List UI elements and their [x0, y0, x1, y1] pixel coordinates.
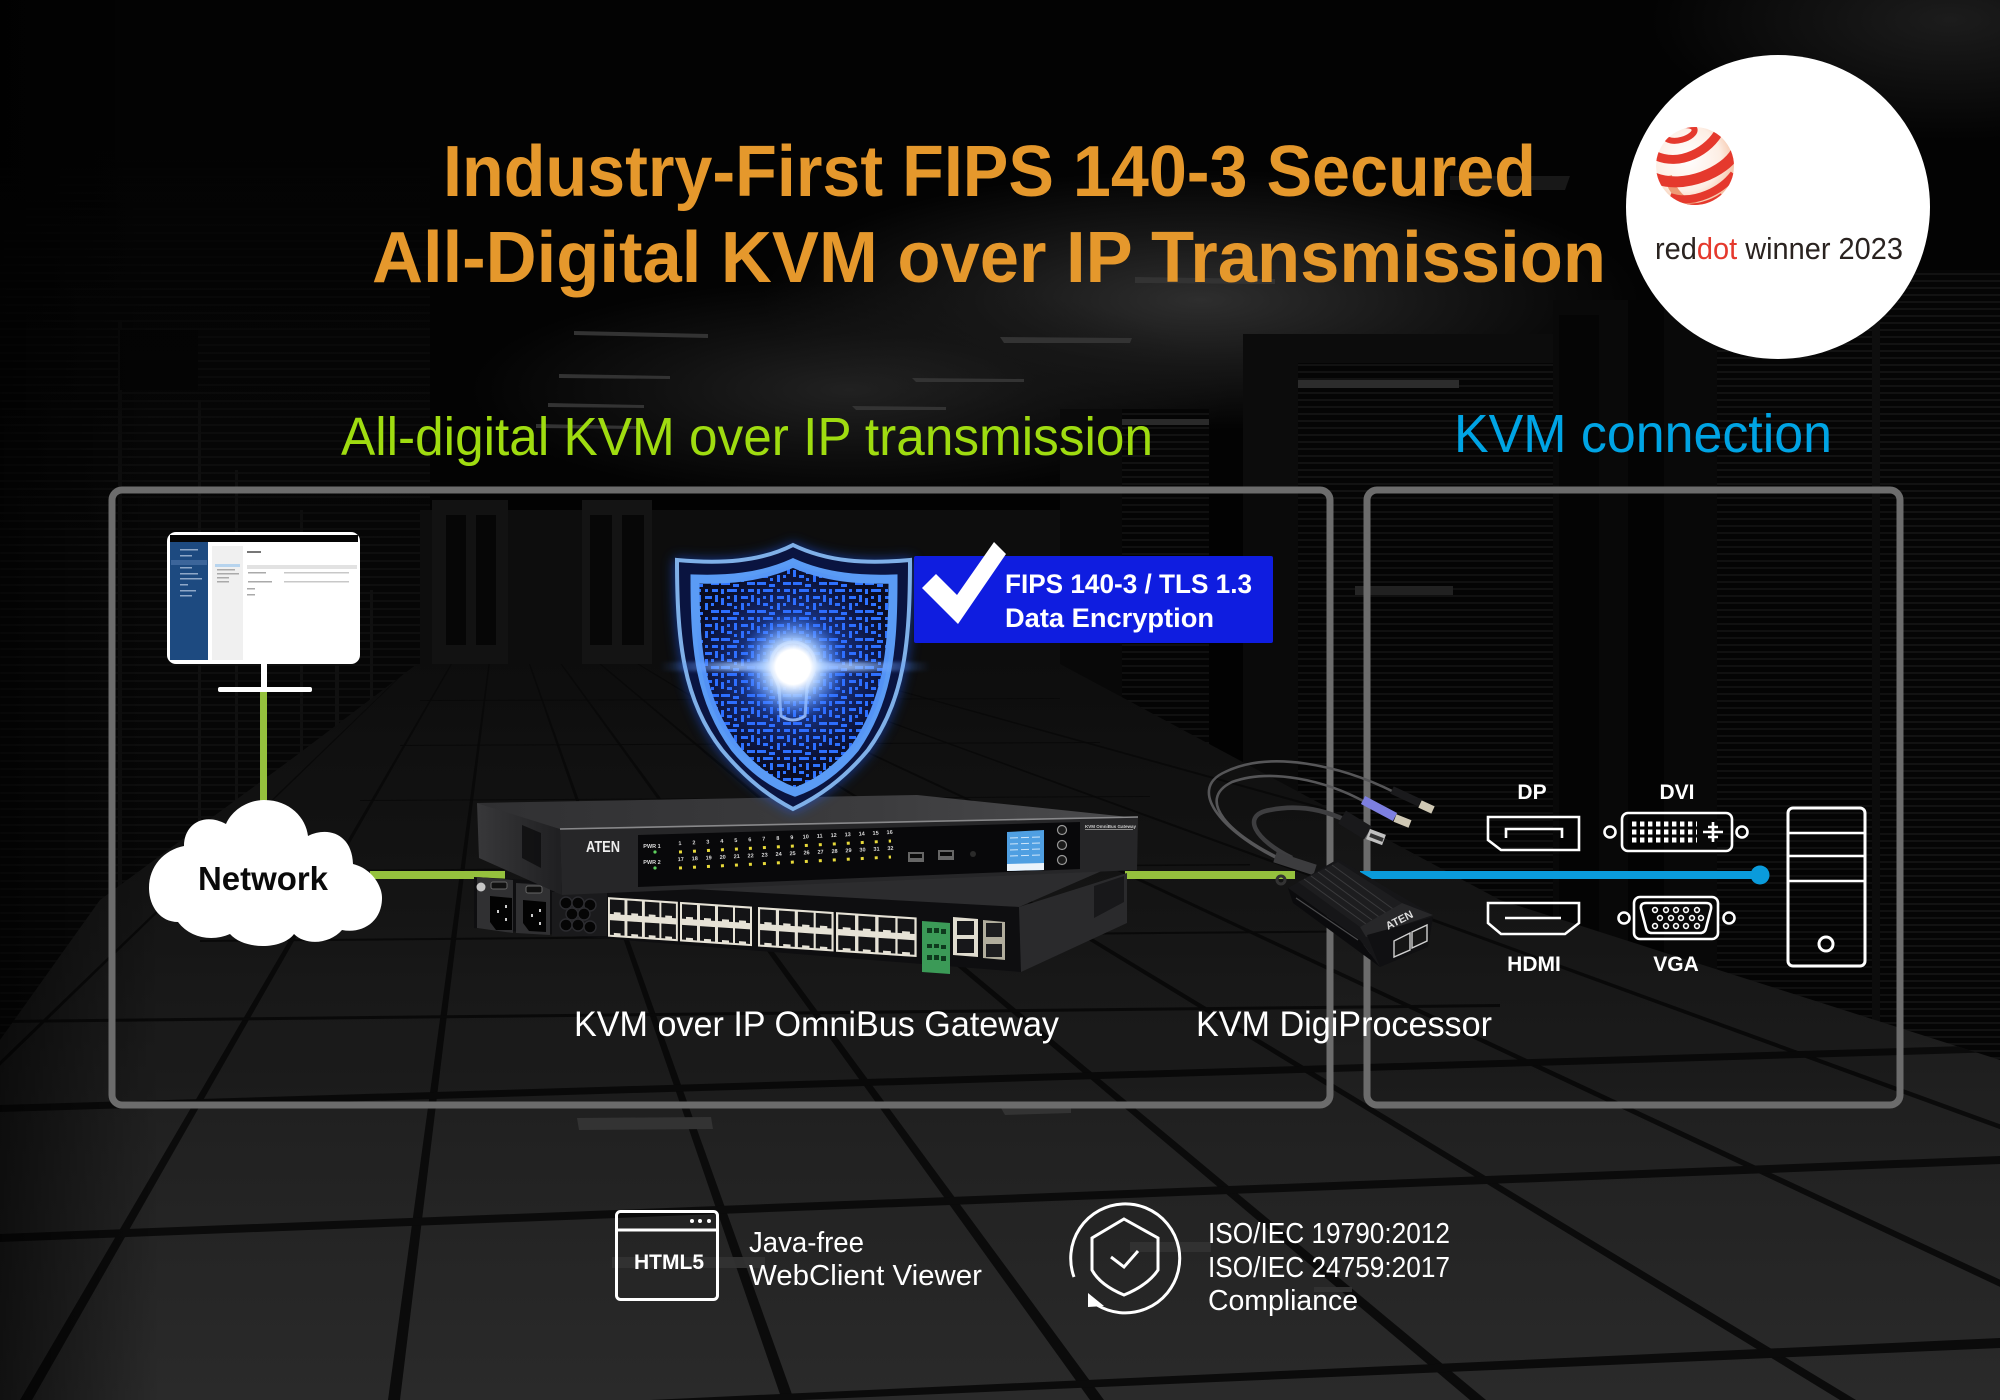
heading: KVM connection: KVM connection [1454, 404, 1832, 464]
port status LEDs: 17 [678, 857, 684, 863]
device: KVM DigiProcessor [1209, 761, 1433, 967]
text: ISO/IEC compliance: ISO/IEC 24759:2017 [1208, 1252, 1450, 1284]
text: Java-free WebClient Viewer [749, 1227, 982, 1292]
text: ISO/IEC compliance: Compliance [1208, 1285, 1358, 1317]
port status LEDs: 11 [817, 834, 823, 840]
port status LEDs [643, 830, 894, 866]
port status LEDs: 18 [692, 856, 698, 862]
text: ISO/IEC compliance [1208, 1218, 1450, 1317]
ATEN logo: ATEN [586, 839, 620, 856]
port status LEDs: 27 [817, 849, 824, 856]
port status LEDs: 7 [762, 837, 766, 843]
port status LEDs: 26 [803, 850, 810, 857]
icon: DVI connector [1604, 781, 1748, 851]
icon: VGA connector: VGA [1653, 953, 1699, 976]
top unit [477, 795, 1138, 895]
port status LEDs: 6 [748, 837, 752, 843]
icon: DP connector [1488, 781, 1579, 850]
icon: HDMI connector: HDMI [1507, 953, 1561, 976]
connector: network lines green [260, 690, 1295, 879]
background: ceiling lights and floor reflections [536, 176, 1570, 1292]
front panel buttons [1058, 826, 1066, 864]
panel: all-digital KVM over IP transmission [112, 490, 1330, 1105]
icon: DVI connector: DVI [1659, 781, 1695, 804]
cables [1209, 761, 1394, 862]
port status LEDs: 30 [859, 847, 866, 854]
icon: network cloud: Network [198, 860, 329, 897]
device: KVM DigiProcessor: ATEN [1384, 909, 1415, 933]
port status LEDs: 14 [858, 831, 866, 838]
port status LEDs: 29 [845, 848, 852, 854]
port status LEDs: PWR 2 [643, 860, 661, 866]
icon: HTML5 browser window: HTML5 [634, 1251, 704, 1274]
plugs [1275, 790, 1433, 870]
USB and audio ports [908, 850, 976, 862]
text: Java-free WebClient Viewer: Java-free [749, 1227, 864, 1259]
icon: HTML5 browser window [616, 1212, 718, 1300]
badge: reddot winner 2023 [1626, 55, 1930, 359]
icon: compliance shield [1071, 1204, 1180, 1313]
caption: KVM over IP OmniBus Gateway: KVM over IP OmniBus Gateway [574, 1005, 1059, 1044]
port status LEDs: 3 [706, 839, 710, 846]
device: KVM over IP OmniBus Gateway [474, 795, 1138, 974]
port status LEDs: 2 [692, 840, 696, 846]
icon: web client monitor [167, 532, 360, 692]
port status LEDs: PWR 1 [643, 844, 661, 850]
caption: KVM DigiProcessor: KVM DigiProcessor [1196, 1005, 1492, 1044]
title: All-Digital KVM over IP Transmission [372, 218, 1606, 298]
port status LEDs: 8 [776, 836, 779, 842]
port status LEDs: 5 [734, 838, 738, 844]
port status LEDs: 4 [720, 839, 725, 845]
port status LEDs: 20 [720, 855, 726, 861]
text: Java-free WebClient Viewer: WebClient Viewer [749, 1260, 982, 1292]
port status LEDs: 21 [733, 854, 740, 860]
reddot winner text: reddot winner 2023 [1655, 231, 1903, 266]
panel: KVM connection [1367, 490, 1900, 1105]
title [372, 132, 1606, 298]
port status LEDs: 12 [831, 833, 837, 839]
callout: FIPS 140-3 / TLS 1.3 data encryption [914, 542, 1273, 643]
port status LEDs: 31 [873, 847, 880, 853]
port status LEDs: 22 [747, 853, 754, 859]
port status LEDs: 24 [775, 852, 783, 858]
port status LEDs: 10 [803, 834, 809, 841]
port status LEDs: 15 [872, 831, 879, 837]
port status LEDs: 32 [887, 846, 894, 852]
icon: VGA connector [1618, 897, 1734, 976]
port status LEDs: 1 [678, 841, 682, 847]
port status LEDs: 16 [886, 830, 893, 836]
port status LEDs: 13 [845, 832, 851, 838]
port status LEDs: 9 [790, 835, 793, 841]
icon: DP connector: DP [1517, 781, 1547, 804]
connector: blue KVM line [1360, 866, 1770, 884]
icon: encryption shield [660, 543, 930, 812]
port status LEDs: 23 [761, 852, 768, 859]
LCD display [1007, 830, 1044, 871]
icon: network cloud [149, 800, 382, 946]
body [1288, 859, 1433, 967]
callout: FIPS 140-3 / TLS 1.3 data encryption: Data Encryption [1005, 603, 1214, 633]
callout: FIPS 140-3 / TLS 1.3 data encryption: FIPS 140-3 / TLS 1.3 [1005, 569, 1252, 599]
icon: HDMI connector [1488, 903, 1579, 976]
icon: reddot globe [1656, 127, 1734, 205]
background: back wall racks [420, 500, 1080, 665]
port status LEDs: 28 [831, 849, 838, 855]
background: floor with perspective tiles [0, 664, 2000, 1400]
background: left server racks [0, 150, 430, 1050]
port status LEDs: 19 [706, 855, 712, 862]
port status LEDs: 25 [789, 851, 796, 857]
bottom unit [474, 860, 1127, 974]
top unit: KVM OmniBus Gateway [1085, 824, 1137, 829]
background: ceiling glow [470, 0, 2000, 500]
heading: all-digital KVM over IP transmission: All-digital KVM over IP transmission [341, 407, 1153, 467]
icon: computer tower [1788, 808, 1865, 966]
text: ISO/IEC compliance: ISO/IEC 19790:2012 [1208, 1218, 1450, 1250]
background: right server racks [1060, 270, 2000, 1060]
title: Industry-First FIPS 140-3 Secured [443, 132, 1536, 212]
